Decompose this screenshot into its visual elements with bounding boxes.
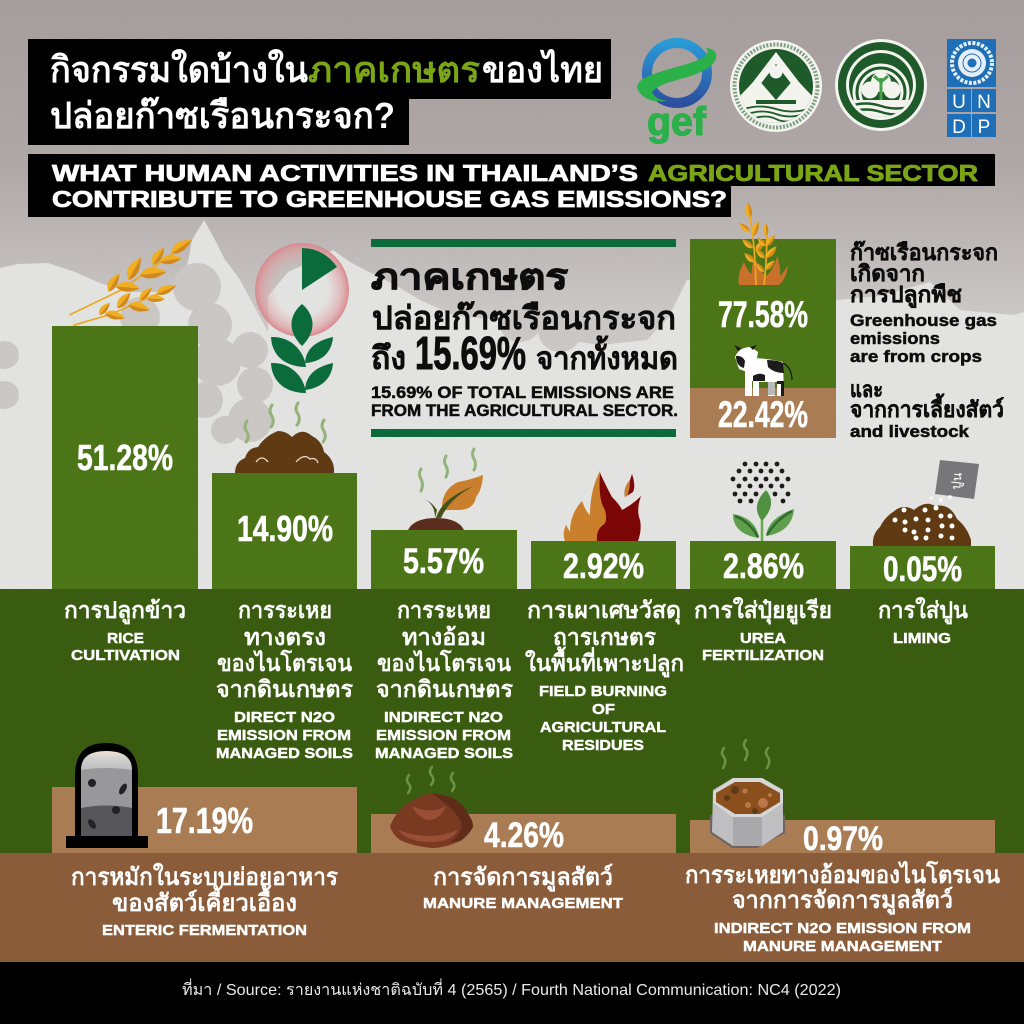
label: urea fertilization: UREA (740, 630, 786, 647)
label: urea fertilization (694, 596, 832, 664)
label: manure management: การจัดการมูลสัตว์ (433, 863, 613, 892)
label: indirect N2O from manure: จากการจัดการมูลสัตว์ (732, 886, 953, 915)
center panel: agriculture headline: ปล่อยก๊าซเรือนกระจก (372, 300, 676, 336)
icon: lime bag and soil (873, 460, 979, 546)
label: direct N2O emission: EMISSION FROM (217, 727, 351, 744)
logo: UNDP: D (952, 117, 966, 138)
bar: field burning (531, 541, 676, 589)
label: manure management (423, 863, 623, 912)
bar: manure management (371, 814, 676, 855)
label: liming: LIMING (893, 630, 951, 647)
label: indirect N2O emission: ของไนโตรเจน (377, 649, 511, 676)
center panel: agriculture headline: จากทั้งหมด (536, 335, 678, 376)
icon: plant with pie share (255, 243, 349, 393)
label: manure management: MANURE MANAGEMENT (423, 895, 623, 912)
label: direct N2O emission: จากดินเกษตร (216, 676, 354, 702)
text: crops and livestock explanation: เกิดจาก (850, 261, 925, 286)
background: grey paper with torn white layer (0, 0, 1024, 600)
title: English: WHAT HUMAN ACTIVITIES IN THAILAND’S (52, 160, 638, 186)
center panel: agriculture headline: ถึง (371, 340, 406, 376)
label: indirect N2O from manure: การระเหยทางอ้อมของไนโตรเจน (685, 860, 1001, 889)
logo: climate change department seal (835, 39, 927, 131)
logo: GEF: gef (647, 100, 707, 144)
label: enteric fermentation: ENTERIC FERMENTATION (102, 922, 307, 939)
text: crops and livestock explanation: ก๊าซเรือนกระจก (850, 240, 998, 265)
logo: UNDP: U (952, 92, 966, 113)
logo: natural resources ministry seal (730, 40, 822, 132)
text: crops and livestock explanation: and livestock (850, 422, 970, 441)
icon: crop sprouts (737, 202, 788, 285)
label: indirect N2O from manure (685, 860, 1001, 955)
crops vs livestock stacked bar: 22.42% (718, 394, 808, 435)
label: urea fertilization: การใส่ปุ๋ยยูเรีย (694, 596, 832, 625)
bar: field burning: 2.92% (563, 547, 644, 586)
label: indirect N2O emission (375, 597, 514, 762)
title: Thai (28, 39, 611, 145)
title: Thai: ภาคเกษตร (308, 49, 481, 90)
icon: rumen digester (66, 743, 148, 848)
footer: source (0, 962, 1024, 1024)
title: English (28, 154, 995, 217)
label: indirect N2O emission: EMISSION FROM (376, 727, 511, 744)
label: rice cultivation: CULTIVATION (71, 647, 180, 664)
label: field burning: RESIDUES (562, 737, 644, 754)
text: crops and livestock explanation (850, 240, 1004, 441)
label: field burning (525, 597, 684, 754)
label: rice cultivation: การปลูกข้าว (64, 597, 186, 625)
bar: direct N2O: 14.90% (237, 508, 333, 549)
text: crops and livestock explanation: การปลูกพืช (850, 282, 962, 309)
label: indirect N2O from manure: MANURE MANAGEMENT (743, 938, 942, 955)
title: English: CONTRIBUTE TO GREENHOUSE GAS EMISSIONS? (52, 186, 727, 212)
icon: manure tank (710, 740, 785, 848)
title: Thai: ปล่อยก๊าซเรือนกระจก? (50, 95, 395, 136)
icon: soil with steam (235, 403, 334, 473)
crops vs livestock stacked bar (690, 239, 836, 438)
label: field burning: ในพื้นที่เพาะปลูก (525, 646, 684, 678)
label: liming: การใส่ปูน (878, 596, 968, 625)
bar: rice cultivation: 51.28% (77, 437, 173, 478)
label: field burning: AGRICULTURAL (540, 719, 666, 736)
label: indirect N2O emission: การระเหย (397, 597, 491, 623)
label: direct N2O emission: การระเหย (238, 597, 332, 623)
logo: UNDP: N (977, 92, 991, 113)
icon: manure pile (390, 767, 473, 848)
green ground band (0, 589, 1024, 853)
bar: rice cultivation (52, 326, 198, 589)
bar: indirect N2O (371, 530, 517, 589)
label: indirect N2O emission: จากดินเกษตร (376, 676, 514, 702)
label: direct N2O emission: ของไนโตรเจน (217, 649, 352, 676)
label: indirect N2O from manure: INDIRECT N2O EMISSION FROM (714, 920, 971, 937)
text: crops and livestock explanation: are from crops (850, 347, 982, 366)
bar: enteric fermentation (52, 787, 357, 853)
label: direct N2O emission: ทางตรง (244, 624, 326, 650)
label: field burning: FIELD BURNING (539, 683, 667, 700)
label: direct N2O emission: MANAGED SOILS (216, 745, 353, 762)
crops vs livestock stacked bar: 77.58% (718, 294, 808, 335)
bar: manure management: 4.26% (484, 816, 564, 855)
bar: indirect N2O from manure: 0.97% (803, 820, 883, 858)
text: crops and livestock explanation: จากการเลี้ยงสัตว์ (850, 393, 1004, 422)
label: liming (878, 596, 968, 647)
label: enteric fermentation: ของสัตว์เคี้ยวเอื้อง (112, 884, 297, 917)
bar: liming (850, 546, 995, 589)
logo: UNDP: P (978, 117, 990, 138)
text: crops and livestock explanation: Greenhouse gas (850, 311, 997, 330)
logo: GEF (637, 43, 716, 144)
bar: urea (690, 541, 836, 589)
center panel: agriculture headline: 15.69% (415, 327, 526, 379)
label: indirect N2O emission: INDIRECT N2O (384, 709, 503, 726)
label: indirect N2O emission: MANAGED SOILS (375, 745, 513, 762)
label: field burning: OF (592, 701, 615, 718)
label: rice cultivation (64, 597, 186, 664)
text: crops and livestock explanation: และ (850, 377, 883, 402)
label: field burning: การเผาเศษวัสดุ (527, 597, 681, 625)
center panel: agriculture headline: 15.69% OF TOTAL EMISSIONS ARE (371, 383, 674, 402)
bar: direct N2O (212, 473, 357, 589)
label: direct N2O emission: DIRECT N2O (234, 709, 335, 726)
bar: liming: 0.05% (883, 550, 962, 589)
label: direct N2O emission (216, 597, 354, 762)
icon: seedling with steam (408, 449, 483, 530)
icon: flames (564, 471, 641, 541)
title: Thai: ของไทย (482, 48, 603, 90)
bar: indirect N2O from manure (690, 820, 995, 858)
footer: source: ที่มา / Source: รายงานแห่งชาติฉบับที่ 4 (2565) / Fourth National Communication: NC4 (2022) (182, 978, 841, 999)
center panel: agriculture headline: FROM THE AGRICULTURAL SECTOR. (371, 401, 678, 420)
text: crops and livestock explanation: emissions (850, 329, 940, 348)
label: field burning: ถารเกษตร (553, 624, 657, 650)
label: rice cultivation: RICE (107, 630, 144, 647)
center panel: agriculture headline (371, 239, 678, 437)
brown ground band (0, 853, 1024, 962)
bar: urea: 2.86% (723, 547, 804, 586)
label: urea fertilization: FERTILIZATION (702, 647, 824, 664)
bar: indirect N2O: 5.57% (403, 542, 484, 581)
label: indirect N2O emission: ทางอ้อม (402, 624, 486, 650)
icon: cow (734, 345, 792, 396)
icon: rice stalks (69, 235, 194, 325)
label: enteric fermentation: การหมักในระบบย่อยอาหาร (71, 862, 338, 891)
center panel: agriculture headline: ภาคเกษตร (371, 256, 569, 297)
label: enteric fermentation (71, 862, 338, 939)
title: Thai: กิจกรรมใดบ้างใน (50, 48, 308, 90)
logo: UNDP (947, 39, 996, 138)
title: English: AGRICULTURAL SECTOR (648, 160, 978, 186)
bar: enteric fermentation: 17.19% (156, 800, 253, 841)
icon: urea dots and plant (731, 462, 794, 541)
icon: lime bag and soil: ปูน (948, 472, 966, 490)
